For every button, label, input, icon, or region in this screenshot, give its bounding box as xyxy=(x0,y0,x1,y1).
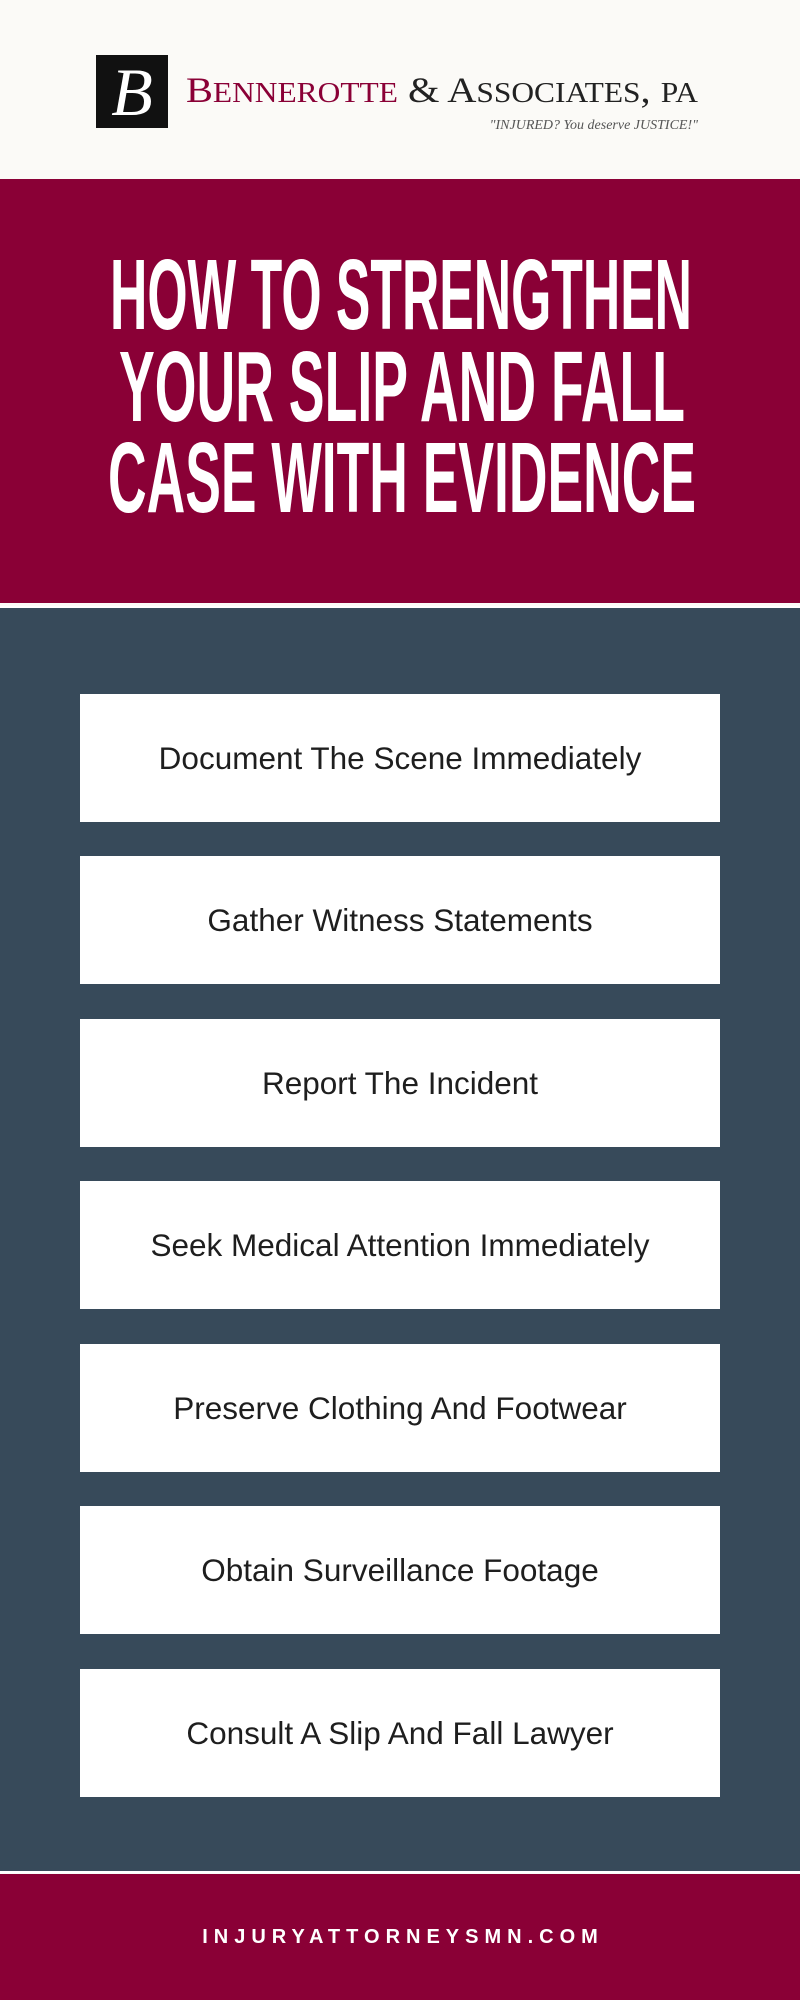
step 1 xyxy=(80,694,720,822)
step 6 xyxy=(80,1506,720,1634)
step 4: Seek Medical Attention Immediately xyxy=(150,1226,650,1262)
firm name: "INJURED? You deserve JUSTICE!" xyxy=(490,118,698,133)
footer xyxy=(0,1874,800,2000)
step 3 xyxy=(80,1019,720,1147)
header logo xyxy=(96,55,699,133)
step 2 xyxy=(80,856,720,984)
step 2: Gather Witness Statements xyxy=(207,902,593,938)
step 7 xyxy=(80,1669,720,1797)
step 3: Report The Incident xyxy=(262,1064,538,1100)
step 5: Preserve Clothing And Footwear xyxy=(173,1390,627,1426)
step 4 xyxy=(80,1181,720,1309)
icon: B monogram xyxy=(96,55,168,128)
firm name xyxy=(186,70,699,133)
step 1: Document The Scene Immediately xyxy=(159,740,641,776)
step 5 xyxy=(80,1344,720,1472)
firm name: BENNEROTTE & A SSOCIATES , PA xyxy=(186,70,699,110)
title banner xyxy=(0,179,800,603)
title xyxy=(108,239,696,534)
footer: INJURYATTORNEYSMN.COM xyxy=(202,1926,604,1948)
steps panel xyxy=(0,606,800,1873)
step 7: Consult A Slip And Fall Lawyer xyxy=(186,1714,614,1750)
step 6: Obtain Surveillance Footage xyxy=(201,1552,599,1588)
